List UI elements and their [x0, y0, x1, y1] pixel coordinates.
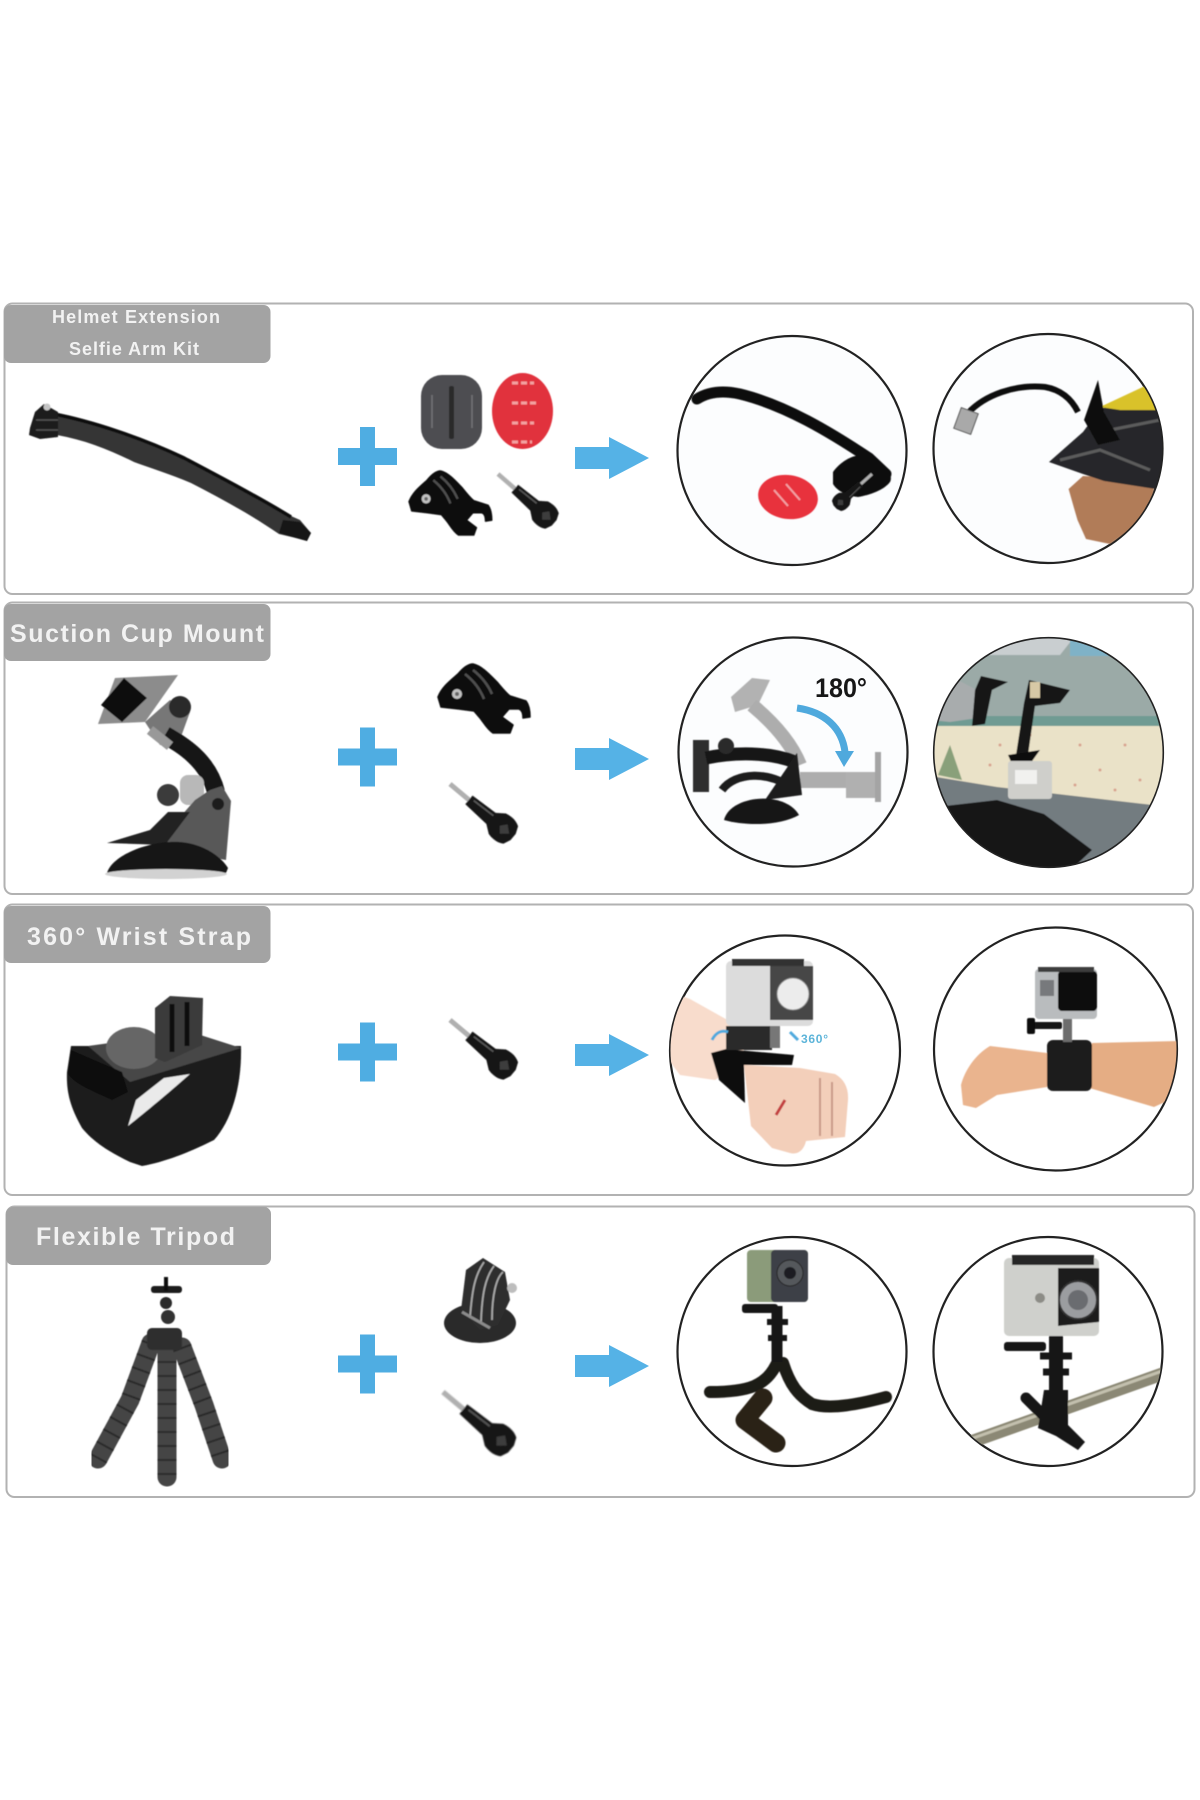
label: Suction Cup Mount: Suction Cup Mount: [10, 620, 265, 648]
circle: strap on arm: [934, 928, 1180, 1170]
icon: flexible tripod: [98, 1277, 222, 1477]
black mount: [693, 738, 802, 824]
icon: wrist strap: [67, 996, 241, 1166]
icon: flat mount: [421, 375, 482, 449]
panel: 360 wrist strap: [4, 904, 1193, 1195]
arrow: [575, 437, 649, 479]
infographic: four mount kits: [4, 302, 1196, 1498]
icon: buckle: [438, 664, 530, 733]
circle: arm on helmet: [934, 334, 1170, 563]
circle: tripod on rail: [934, 1237, 1165, 1466]
arrow: [575, 738, 649, 780]
icon: plus: [338, 1022, 397, 1082]
icon: thumb screw: [441, 773, 522, 848]
label: Helmet Extension Selfie Arm Kit: [4, 305, 270, 363]
icon: suction cup mount: [98, 675, 231, 879]
label: 360 Wrist Strap: 360° Wrist Strap: [27, 923, 251, 951]
label: Helmet Extension Selfie Arm Kit: Selfie Arm Kit: [69, 339, 199, 359]
icon: plus: [338, 728, 397, 786]
icon: thumb screw: [441, 1009, 522, 1084]
circle: mount on windshield: [930, 636, 1170, 880]
ghost mount, raised and lowered: [731, 678, 881, 802]
icon: thumb screw: [433, 1380, 521, 1461]
icon: tripod adapter: [444, 1258, 517, 1343]
panel: flexible tripod: [6, 1206, 1194, 1497]
label: Suction Cup Mount: [4, 604, 270, 661]
icon: plus: [338, 1334, 397, 1394]
panel: suction cup mount: [4, 602, 1193, 894]
180 degree label: 180°: [815, 673, 867, 703]
circle: tripod with camera: [678, 1237, 906, 1466]
icon: extension arm: [29, 404, 311, 541]
label: 360 Wrist Strap: [4, 906, 270, 963]
label: Helmet Extension Selfie Arm Kit: Helmet Extension: [52, 307, 220, 327]
circle: strap on wrist with 360 rotation: [665, 936, 900, 1166]
blue rotation arrow: [797, 708, 854, 767]
circle: arm and pad: [678, 336, 906, 565]
circle: 180 degree rotation: [678, 638, 908, 866]
arrow: [575, 1345, 649, 1387]
360 degree label: 360°: [801, 1032, 828, 1046]
icon: buckle: [409, 471, 492, 535]
panel: helmet extension selfie arm kit: [4, 304, 1193, 594]
icon: red adhesive pad: [492, 373, 553, 449]
icon: plus: [338, 427, 397, 486]
icon: thumb screw: [490, 464, 563, 533]
label: Flexible Tripod: [6, 1207, 271, 1265]
label: Flexible Tripod: Flexible Tripod: [36, 1223, 235, 1251]
arrow: [575, 1034, 649, 1076]
